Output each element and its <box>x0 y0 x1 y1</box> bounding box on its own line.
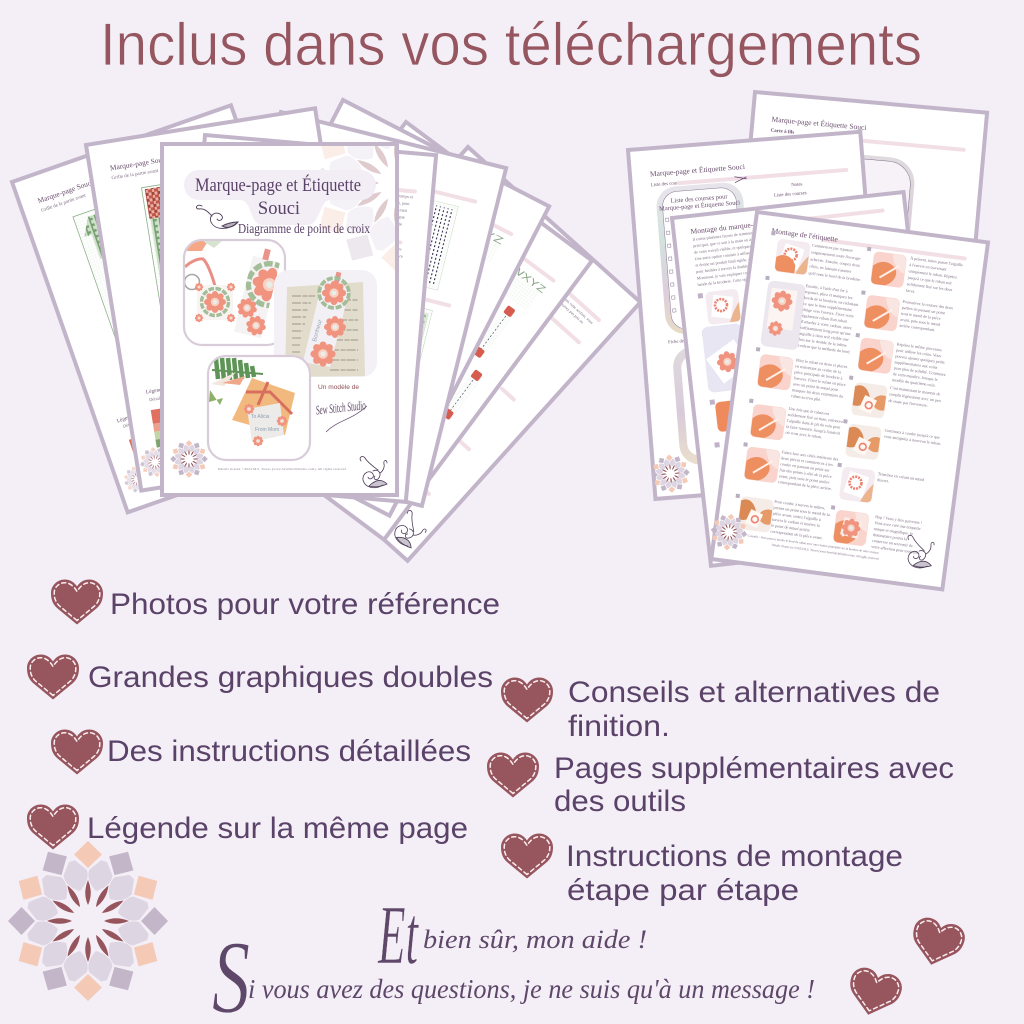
credit: model by: Un modèle de <box>318 384 359 391</box>
item: assembly instructions: étape par étape <box>567 874 799 907</box>
step text, left column: achevée. Ensuite, coupez deux <box>810 256 860 269</box>
photo: bookmark on open book <box>274 270 377 377</box>
page: bookmark assembly: Montage du marque-page <box>690 218 768 236</box>
step text, left column <box>770 242 866 541</box>
step text, left column: l'aiguille dans le pli du coin pour <box>787 418 841 430</box>
step text, right column: de ouate par l'ouverture. <box>888 398 928 408</box>
step text, right column: remplir légèrement avec un peu <box>889 391 941 403</box>
step text, right column: de cette manière, lorsque le <box>893 371 938 383</box>
page heading: Montage de l'étiquette <box>771 226 839 244</box>
step text, right column: parties en passant un point <box>901 305 946 315</box>
step text, left column: dirige vers l'envers. Fixez votre <box>802 307 854 319</box>
item: legend: Légende sur la même page <box>87 812 468 845</box>
item: photos: Photos pour votre référence <box>110 588 500 621</box>
page: alphabet and strip charts: WXYZ <box>509 263 547 296</box>
step text, left column: solidement fixé au tissu, enfoncez <box>787 412 843 425</box>
cover title: Souci <box>258 199 300 219</box>
step text, left column: pièce principale de broderie à <box>794 369 843 381</box>
photo: keyring pillow and bookmark <box>184 240 298 345</box>
step text, left column: deux pièces et commencez à les <box>781 455 834 467</box>
item: assembly instructions <box>501 834 903 907</box>
page: shopping list: Liste des courses pour <box>670 193 729 205</box>
page: XYZ chart and notes: XYZ <box>472 223 505 247</box>
step text, right column: Terminez en créant un nœud <box>878 471 924 482</box>
step text, left column: où vous avez le ruban. <box>785 430 822 439</box>
step text, right column: Continuez à coudre jusqu'à ce que <box>884 428 941 440</box>
page: left chart page, pale: Marque-page Souci <box>36 178 94 205</box>
page: bookmark assembly: et donne un produit final rigide, de <box>695 256 753 269</box>
page: shopping list: Liste des courses <box>774 191 807 199</box>
step text, left column: Commencez par repasser <box>812 243 854 253</box>
step text, left column: pièce avant, sortez l'aiguille à <box>772 511 821 523</box>
step text, right column: supplémentaires aux coins <box>894 359 938 370</box>
page: text page behind the cover: pour <box>383 322 391 328</box>
list: left features <box>27 580 500 850</box>
step text, right column: pour plus de solidité. Continuez <box>894 365 946 377</box>
step text, left column: ruban au trou plié. <box>791 393 821 402</box>
step text, left column: ce que le tissu supplémentaire <box>803 301 853 312</box>
step text, right column: Vous avez créé une étiquette <box>874 520 921 531</box>
item: charts: Grandes graphiques doubles <box>88 661 493 694</box>
page: text page behind the cover: avec <box>382 336 390 342</box>
step text, left column: soigneusement toute l'ouvrage <box>811 249 861 261</box>
icon: heart bottom right <box>843 965 905 1021</box>
icon: large mandala logo <box>8 841 168 1001</box>
page: text page behind the cover: exercice <box>389 253 403 259</box>
page: XYZ chart and notes: à la <box>385 402 393 409</box>
item: finishing tips: finition. <box>568 710 670 743</box>
item: charts <box>27 654 493 700</box>
step text, left column: repasser, pliez et marquez les <box>805 289 853 301</box>
page: text page behind the cover: vers <box>381 343 389 349</box>
step text, right column: vous atteigniez à nouveau le ruban. <box>884 433 941 446</box>
page: second chart page <box>86 108 370 491</box>
step text, left column: d'attacher à votre cadeau, assez <box>801 319 852 331</box>
page: shopping list: Notes <box>791 182 803 188</box>
page: second chart page: Grille de la partie avant <box>111 169 159 181</box>
page: XYZ chart and notes <box>183 100 549 516</box>
item: assembly instructions: Instructions de montage <box>566 840 903 873</box>
step text, left column: prenez un point sous le nœud de la <box>773 505 830 517</box>
page: text page behind the cover: Bisque <box>386 282 398 288</box>
page: bookmark assembly: Une autre option consiste à utiliser <box>694 250 752 261</box>
step text, left column: également ruban d'un ruban <box>802 313 847 324</box>
item: photos <box>51 580 500 624</box>
icon: heart top right <box>906 915 968 971</box>
step text, right column: jusqu'à ce que le ruban soit <box>906 275 953 286</box>
page: alphabet and strip charts <box>198 122 592 540</box>
step text, right column: pour utiliser les coins. Vous <box>896 347 942 358</box>
step thumbnails <box>736 238 907 547</box>
page: XYZ chart and notes: je peux <box>387 396 401 407</box>
page: text page behind the cover: sera <box>382 329 389 335</box>
icon: page swirl <box>904 535 935 569</box>
step text, left column: fois sur le double de la même <box>798 337 847 348</box>
script message: Et <box>377 889 419 982</box>
step text, left column: en remontant au centre de la <box>795 363 842 374</box>
page: cover <box>160 142 399 497</box>
page: thread card <box>724 92 987 461</box>
step text, right column: conserver un souvenir de <box>872 538 913 548</box>
page: alphabet and strip charts: spécifiées dans <box>391 423 414 442</box>
panel: instruction pages <box>626 92 988 589</box>
page: second chart page: Légende <box>145 387 165 396</box>
step text, left column: qu'il reste le bord de la broderie. <box>808 270 861 282</box>
item: extra pages: Pages supplémentaires avec <box>554 752 954 785</box>
credit: model by: Sew Stitch Studio <box>315 397 367 417</box>
page: text page behind the cover: ion mais <box>393 207 408 213</box>
step text, left column: Ensuite, à l'aide d'un fer à <box>805 283 848 294</box>
step text, left column: l'envers. Fixez le ruban en place <box>793 375 846 387</box>
page: shopping list: Liste des courses <box>651 181 684 188</box>
item: instructions <box>51 730 471 774</box>
script message: i vous avez des questions, je ne suis qu'à un message ! <box>248 974 815 1004</box>
page: XYZ chart and notes: avec <box>459 260 468 268</box>
photo: gift box with tag: From Mom <box>255 427 279 433</box>
page: XYZ chart and notes: ions de <box>456 265 469 275</box>
page: bookmark assembly: Montrerai, je vais expliquer comment <box>697 269 759 282</box>
step text, left column: couleur que la méthode du bord. <box>798 343 851 354</box>
page: alphabet and strip charts: fabriqué en <box>386 430 404 445</box>
step text, left column: marquer les deux extrémités du <box>792 387 843 399</box>
page: left chart page, pale <box>12 105 347 512</box>
photo: bookmark on open book: Bonheur <box>312 319 324 343</box>
page: thread card: Marque-page et Étiquette Souci <box>771 114 867 132</box>
step text, right column <box>868 255 965 556</box>
step text, right column: à l'envers en traversant <box>909 262 948 272</box>
step text, left column: Faites face aux côtés intérieurs des <box>782 449 839 462</box>
step text, left column: Une fois que le ruban est <box>788 406 830 416</box>
panel: fan of pattern pages <box>12 93 640 561</box>
page: shopping list: Marque-page et Étiquette Souci <box>650 161 745 178</box>
page: bookmark assembly: bande de la broderie. Cette option <box>697 276 753 287</box>
credit: model by <box>315 384 367 432</box>
item: instructions: Des instructions détaillées <box>107 735 471 768</box>
copyright line: Détails Gratuit ©2024 M.S. Torres (www.SewStitchStudio.com). All rights reserved <box>218 466 346 471</box>
step text, right column: avant, puis sous le nœud <box>900 317 940 328</box>
script message <box>212 889 815 1024</box>
page: bookmark assembly: de votre travail visible, et quelques étapes <box>694 242 763 256</box>
page: text page behind the cover <box>175 135 436 502</box>
list: right features <box>487 676 954 907</box>
step number badges <box>736 231 872 511</box>
page: text page behind the cover: en temps et <box>394 193 414 199</box>
step text, right column: votre affection pour toujours. <box>871 544 919 555</box>
step text, left column: Pour coudre à travers le milieu, <box>774 499 826 511</box>
page: thread card: Carte à fils <box>770 129 794 136</box>
step text, right column: solidement fixé sur les deux <box>907 281 953 292</box>
step text, left column: Pliez le ruban en deux et placez <box>796 357 848 369</box>
step text, right column: Hop ! Vous y êtes parvenus ! <box>875 514 922 525</box>
item: extra pages <box>487 752 954 818</box>
page: text page, far right of fan <box>235 147 640 561</box>
item: legend <box>27 804 468 850</box>
step text, right column: discret. <box>877 477 889 484</box>
step text, left column: correspondant de la pièce avant. <box>770 529 823 540</box>
cover title: Marque-page et Étiquette <box>195 174 361 196</box>
step text, left column: avec un point de nœud pour <box>793 381 839 392</box>
step text, left column: côtés, en laissant s'assurer <box>809 263 853 275</box>
page heading <box>771 226 968 261</box>
step text, right column: unique et magnifique, le <box>873 526 914 537</box>
step text, left column: bords de la broderie, en réduisant <box>804 295 860 308</box>
page: text page, far right of fan: dans cette section, vous <box>562 296 595 326</box>
page: bookmark assembly <box>672 192 943 566</box>
step text, right column: modèle du quatrième coin. <box>892 377 936 388</box>
page: chart with symbols <box>197 112 506 506</box>
page footer: Détails d'exercice ©2024 M.S. Torres (www.SewStitchStudio.com). All rights reserved <box>771 542 879 561</box>
item: finishing tips <box>501 676 940 743</box>
page: text page behind the cover: dire, pour <box>394 200 411 207</box>
photo: gift box with tag <box>208 356 310 460</box>
page: text page behind the cover: compte <box>392 214 405 220</box>
step text, right column: C'est maintenant le moment de <box>890 385 941 396</box>
step text, right column: uniquement le ruban. Répétez <box>908 268 958 280</box>
step text, left column: l'un des points à côté de la pièce <box>779 467 832 479</box>
icon: corner swirl <box>360 457 387 488</box>
icon: swirl <box>196 205 238 228</box>
page: shopping list: Fiche de <box>668 338 684 344</box>
title: Inclus dans vos téléchargements <box>100 11 922 78</box>
step text, right column: Poursuivez la couture des deux <box>902 299 953 310</box>
page logo <box>708 511 750 553</box>
step text, right column: sous le nœud de la pièce <box>901 311 941 321</box>
icon: cover logo <box>170 440 208 478</box>
page: text page behind the cover: elle J <box>387 275 396 281</box>
page: left chart page, pale: Légende <box>116 413 136 425</box>
step text, left column: suffisamment long pour qu'une <box>800 325 851 336</box>
page: XYZ chart and notes: face <box>453 271 462 278</box>
step text, right column: faces. <box>906 288 916 294</box>
watermark mandala <box>320 146 395 270</box>
page: second chart page: Marque-page Souci <box>109 154 168 172</box>
page: shopping list <box>626 132 888 499</box>
step text, right column: pouvez ajouter quelques petits <box>895 353 945 365</box>
page: bookmark assembly: pour fusibler à travers la doublure <box>696 263 752 274</box>
page: shopping list: Marque-page et Étiquette Souci <box>659 198 741 213</box>
script message: bien sûr, mon aide ! <box>423 925 647 954</box>
step text, left column: avant, puis sous le point arrière <box>778 473 830 486</box>
page: bookmark assembly: principal, que ce soit à la main ou à la machine, <box>693 235 771 249</box>
item: extra pages: des outils <box>554 785 686 818</box>
step text, left column: aiguille à tissu soit visible une <box>799 331 849 342</box>
page: text page behind the cover: tôt, des <box>390 246 402 253</box>
step text, left column: la faire ressortir. Jusqu'à l'endroit <box>786 424 841 436</box>
step text, left column: correspondant de la pièce arrière. <box>778 479 832 491</box>
item: finishing tips: Conseils et alternatives de <box>568 676 940 709</box>
step text, left column: le point de nœud arrière <box>771 523 811 533</box>
cover title: Diagramme de point de croix <box>238 221 370 236</box>
photo: gift box with tag: To Alicia <box>251 414 270 420</box>
page: text page behind the cover: traitée <box>392 221 403 227</box>
page: tag assembly <box>707 211 988 589</box>
step text, right column: destinataire pourra la <box>873 532 908 541</box>
step text, right column: arrière correspondant. <box>899 323 935 332</box>
step text, right column: Répétez le même processus <box>897 341 942 352</box>
page: second chart page: Détails <box>149 395 162 402</box>
page: text page, far right of fan: pourrez pas pris au <box>558 300 585 324</box>
page: bookmark assembly: Il existe plusieurs façons de terminer votre <box>692 229 762 242</box>
step text, right column: À présent, faites passer l'aiguille <box>910 255 964 268</box>
page: left chart page, pale: Grille de la partie avant <box>41 193 87 214</box>
page: left chart page, pale: Détails <box>122 420 136 429</box>
page footer: Conseils : Vous pouvez broder le bord du ruban avec une couture principale sur la bordure de cette couture. <box>747 534 880 555</box>
step text, left column: coudre en passant un point sur <box>780 461 831 473</box>
step text, left column: travers le cadeau et insérez la <box>772 517 820 528</box>
page: text page behind the cover: Une <box>384 315 391 321</box>
cover title <box>184 170 376 236</box>
page: XYZ chart and notes: ne vous <box>391 391 405 402</box>
